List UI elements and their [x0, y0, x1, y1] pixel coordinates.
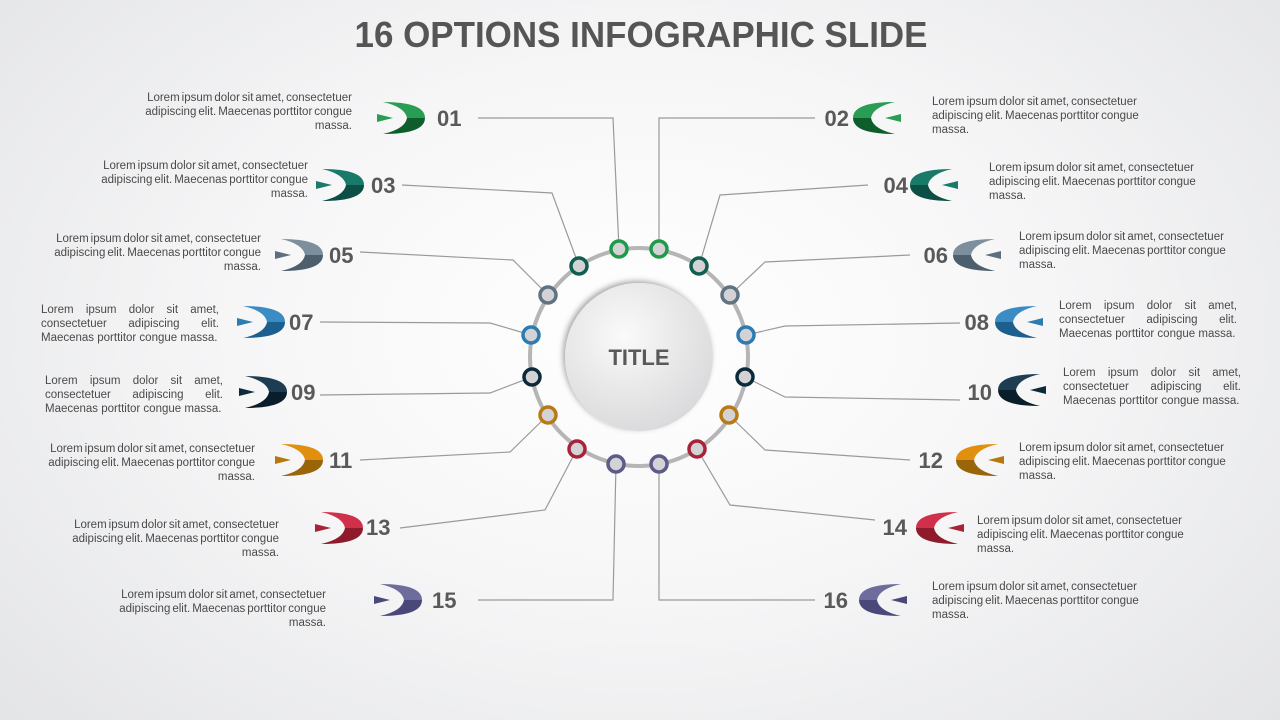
- icon 01: [377, 102, 425, 134]
- numbers: 05: [329, 243, 353, 268]
- numbers: 11: [329, 448, 352, 473]
- text 15: Lorem ipsum dolor sit amet, consectetuer adipiscing elit. Maecenas porttitor congue massa.: [119, 589, 326, 629]
- icon 07: [237, 306, 285, 338]
- numbers: 10: [968, 380, 992, 405]
- numbers: 15: [432, 588, 456, 613]
- center circle: TITLE: TITLE: [608, 345, 670, 370]
- text 12: Lorem ipsum dolor sit amet, consectetuer adipiscing elit. Maecenas porttitor congue massa.: [1019, 442, 1226, 482]
- icon 16: [859, 584, 907, 616]
- text 02: Lorem ipsum dolor sit amet, consectetuer adipiscing elit. Maecenas porttitor congue massa.: [932, 96, 1139, 136]
- text 04: Lorem ipsum dolor sit amet, consectetuer adipiscing elit. Maecenas porttitor congue massa.: [989, 162, 1196, 202]
- text 16: Lorem ipsum dolor sit amet, consectetuer adipiscing elit. Maecenas porttitor congue massa.: [932, 581, 1139, 621]
- numbers: [289, 106, 992, 613]
- ring nodes: [523, 241, 754, 472]
- icon 05: [275, 239, 323, 271]
- text 03: Lorem ipsum dolor sit amet, consectetuer adipiscing elit. Maecenas porttitor congue massa.: [101, 160, 308, 200]
- text 11: Lorem ipsum dolor sit amet, consectetuer adipiscing elit. Maecenas porttitor congue massa.: [48, 443, 255, 483]
- connector lines: [320, 118, 960, 600]
- text 06: Lorem ipsum dolor sit amet, consectetuer adipiscing elit. Maecenas porttitor congue massa.: [1019, 231, 1226, 271]
- icon 04: [910, 169, 958, 201]
- text 10: Lorem ipsum dolor sit amet, consectetuer adipiscing elit. Maecenas porttitor congue massa.: [1063, 367, 1241, 407]
- center circle: TITLE: [565, 283, 713, 431]
- text 09: Lorem ipsum dolor sit amet, consectetuer adipiscing elit. Maecenas porttitor congue massa.: [45, 375, 223, 415]
- numbers: 02: [825, 106, 849, 131]
- numbers: 01: [437, 106, 461, 131]
- numbers: 16: [824, 588, 848, 613]
- icon 06: [953, 239, 1001, 271]
- ring: [530, 248, 748, 466]
- icon 03: [316, 169, 364, 201]
- text 01: Lorem ipsum dolor sit amet, consectetuer adipiscing elit. Maecenas porttitor congue massa.: [145, 92, 352, 132]
- numbers: 08: [965, 310, 989, 335]
- numbers: 03: [371, 173, 395, 198]
- icon 13: [315, 512, 363, 544]
- icon 02: [853, 102, 901, 134]
- numbers: 09: [291, 380, 315, 405]
- numbers: 14: [883, 515, 908, 540]
- text 13: Lorem ipsum dolor sit amet, consectetuer adipiscing elit. Maecenas porttitor congue massa.: [72, 519, 279, 559]
- text 05: Lorem ipsum dolor sit amet, consectetuer adipiscing elit. Maecenas porttitor congue massa.: [54, 233, 261, 273]
- icon 14: [916, 512, 964, 544]
- icon 09: [239, 376, 287, 408]
- icon 15: [374, 584, 422, 616]
- icon 12: [956, 444, 1004, 476]
- numbers: 13: [366, 515, 390, 540]
- text 14: Lorem ipsum dolor sit amet, consectetuer adipiscing elit. Maecenas porttitor congue massa.: [977, 515, 1184, 555]
- numbers: 12: [919, 448, 943, 473]
- numbers: 07: [289, 310, 313, 335]
- icon 08: [995, 306, 1043, 338]
- numbers: 06: [924, 243, 948, 268]
- numbers: 04: [884, 173, 909, 198]
- title: 16 OPTIONS INFOGRAPHIC SLIDE: [354, 14, 928, 55]
- text 08: Lorem ipsum dolor sit amet, consectetuer adipiscing elit. Maecenas porttitor congue massa.: [1059, 300, 1237, 340]
- text 07: Lorem ipsum dolor sit amet, consectetuer adipiscing elit. Maecenas porttitor congue massa.: [41, 304, 219, 344]
- icon 10: [998, 374, 1046, 406]
- icon 11: [275, 444, 323, 476]
